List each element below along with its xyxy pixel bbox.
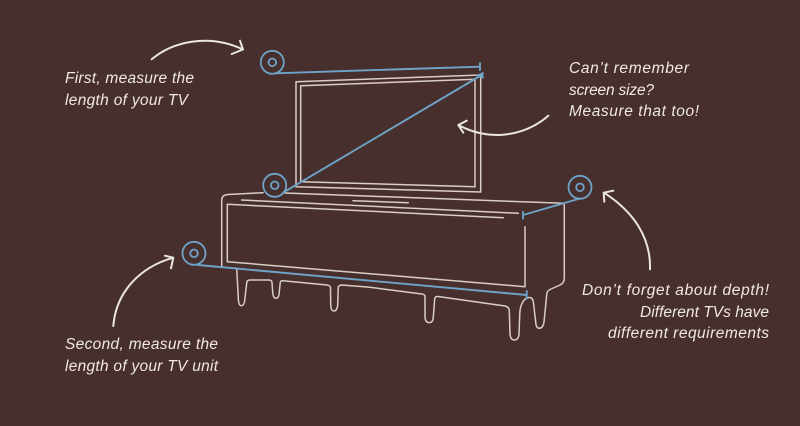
text: second step — [65, 336, 219, 375]
cabinet front panel — [227, 204, 525, 287]
arrow: to depth tape — [604, 191, 650, 269]
television outline — [296, 75, 481, 192]
arrow: to screen diagonal — [458, 116, 548, 135]
text: screen size — [569, 60, 700, 120]
text: depth reminder: Don’t forget about depth! — [582, 282, 770, 299]
tape measure: TV unit length — [182, 242, 527, 298]
text: depth reminder — [582, 282, 770, 342]
text: depth reminder: different requirements — [608, 325, 769, 342]
arrow: to TV length tape — [152, 41, 243, 59]
cabinet top detail lines — [242, 200, 518, 213]
tape measure: depth — [523, 176, 592, 218]
text: depth reminder: Different TVs have — [640, 304, 769, 321]
TV unit outline — [222, 193, 564, 340]
cabinet body with legs — [222, 193, 564, 340]
text: first step — [65, 70, 194, 109]
text: screen size: Can’t remember — [569, 60, 690, 77]
text: first step: length of your TV — [65, 92, 190, 109]
tape measure: TV length — [261, 51, 480, 74]
tape measure: screen diagonal — [263, 72, 483, 197]
text: screen size: Measure that too! — [569, 103, 700, 120]
text: first step: First, measure the — [65, 70, 194, 87]
text: second step: length of your TV unit — [65, 358, 219, 375]
text: screen size: screen size? — [569, 82, 654, 99]
arrow: to TV unit tape — [113, 256, 173, 326]
text: second step: Second, measure the — [65, 336, 218, 353]
